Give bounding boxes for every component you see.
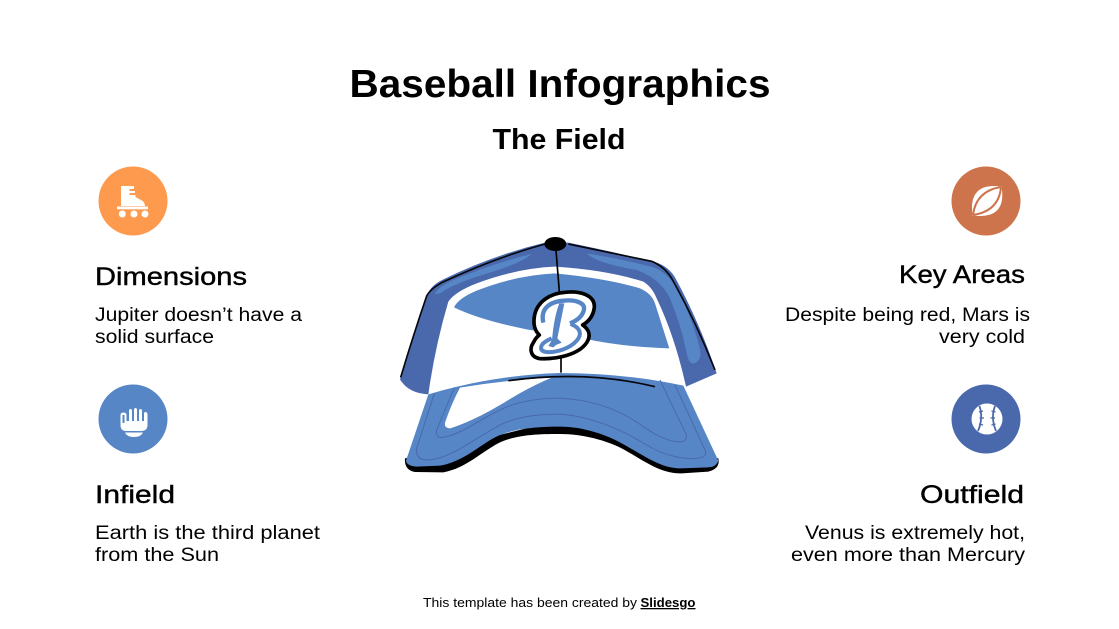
heading: infield: Infield	[95, 481, 175, 509]
icon: football	[952, 166, 1020, 236]
footer	[423, 595, 696, 610]
cap front blue panel	[454, 273, 669, 348]
heading: outfield: Outfield	[920, 481, 1024, 509]
icon: roller skate	[98, 166, 168, 236]
visor white highlight	[445, 378, 552, 428]
text: dimensions: Jupiter doesn’t have a	[95, 305, 302, 326]
visor seam line	[508, 377, 655, 387]
icon: baseball	[952, 384, 1020, 454]
panel: dimensions	[95, 166, 302, 348]
cap button	[544, 237, 566, 251]
cap visor	[406, 373, 718, 468]
footer link: Slidesgo	[640, 595, 696, 610]
panel: infield	[95, 384, 321, 566]
text: infield line 2: from the Sun	[95, 545, 219, 566]
visor outer stitching	[416, 385, 706, 460]
text: infield: Earth is the third planet	[95, 523, 321, 544]
title: Baseball Infographics	[350, 63, 770, 106]
crown centre seam	[556, 250, 561, 373]
panel: outfield	[791, 384, 1026, 566]
text: outfield: Venus is extremely hot,	[805, 523, 1025, 544]
crown highlight right	[587, 253, 701, 363]
cap crown white front	[428, 267, 686, 394]
text: outfield line 2: even more than Mercury	[791, 545, 1026, 566]
heading: dimensions: Dimensions	[95, 263, 247, 291]
visor underside	[405, 420, 719, 473]
crown highlights	[435, 254, 532, 294]
text: key areas line 2: very cold	[939, 327, 1025, 348]
footer text: This template has been created by	[423, 595, 638, 610]
heading: key areas: Key Areas	[899, 261, 1025, 289]
illustration: baseball cap	[400, 237, 719, 473]
text: dimensions line 2: solid surface	[95, 327, 214, 348]
logo letter B	[531, 292, 594, 359]
cap crown back panel	[400, 243, 717, 394]
text: key areas: Despite being red, Mars is	[785, 305, 1030, 326]
visor stitching	[436, 380, 686, 442]
panel: key areas	[785, 166, 1030, 348]
subtitle: The Field	[492, 124, 626, 156]
icon: glove	[98, 384, 168, 454]
crown seam lines	[401, 244, 715, 377]
